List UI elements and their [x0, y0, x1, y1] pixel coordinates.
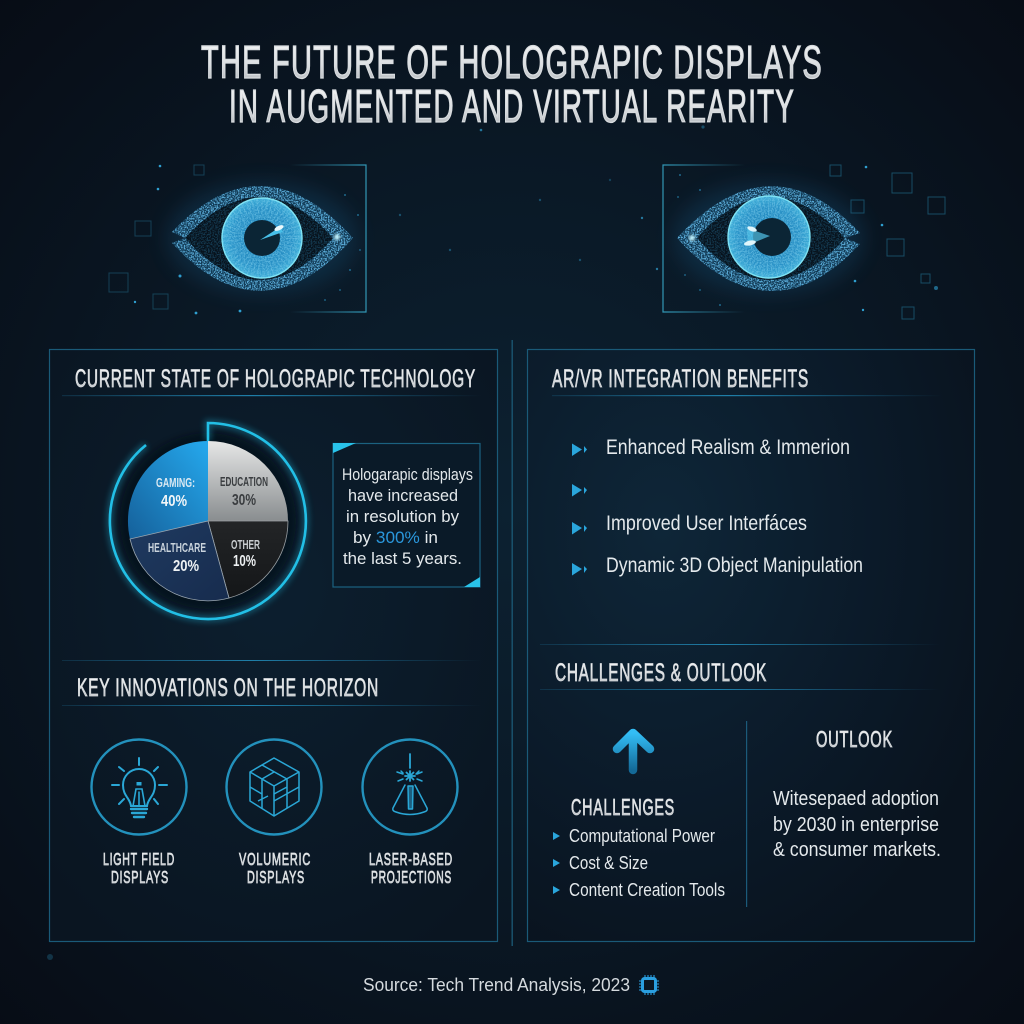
vertical divider between panels — [512, 340, 513, 946]
label: light field displays: DISPLAYS — [111, 867, 169, 887]
bullet 3 — [572, 522, 587, 534]
label: other: OTHER — [231, 537, 260, 552]
panel: left — [50, 350, 498, 942]
slice: other — [208, 521, 288, 598]
decorative squares right — [830, 165, 945, 319]
benefit: manipulation: Dynamic 3D Object Manipulation — [606, 554, 863, 577]
slice: gaming — [128, 441, 208, 539]
label: volumetric displays: VOLUMERIC — [239, 849, 311, 869]
label: other — [231, 537, 260, 570]
callout: resolution stat: in resolution by — [346, 507, 459, 526]
bullet 1 — [572, 444, 587, 456]
label: gaming — [156, 475, 195, 510]
outlook text: & consumer markets. — [773, 839, 941, 861]
outlook block — [773, 726, 941, 861]
challenges block — [553, 794, 725, 900]
label: volumetric displays — [239, 849, 311, 887]
outlook text: Witesepaed adoption — [773, 788, 939, 810]
callout: resolution stat: Hologarapic displays — [342, 465, 473, 484]
heading: challenges and outlook: CHALLENGES & OUTLOOK — [555, 659, 767, 687]
pie chart — [110, 423, 306, 619]
callout: resolution stat: the last 5 years. — [343, 549, 462, 568]
benefit: realism: Enhanced Realism & Immerion — [606, 436, 850, 459]
bullet 2 — [572, 484, 587, 496]
icon: right holographic eye — [663, 165, 864, 312]
background particles — [47, 125, 938, 960]
benefit: interfaces: Improved User Interfáces — [606, 512, 807, 535]
icon: volumetric cube — [226, 740, 322, 834]
challenge item 3: Content Creation Tools — [569, 880, 725, 900]
bullet 4 — [572, 563, 587, 576]
heading: outlook: OUTLOOK — [816, 726, 893, 752]
callout: resolution stat: by 300% in — [353, 528, 438, 547]
icon: left holographic eye — [167, 165, 366, 312]
outlook text — [773, 788, 941, 861]
slice: education — [208, 441, 288, 521]
label: healthcare — [148, 540, 206, 575]
label: education: 30% — [232, 492, 256, 509]
label: education — [220, 474, 268, 509]
label: laser-based projections: LASER-BASED — [369, 849, 453, 869]
decorative squares left — [109, 165, 204, 309]
label: healthcare: 20% — [173, 558, 199, 575]
label: gaming: GAMING: — [156, 475, 195, 490]
source footer: Source: Tech Trend Analysis, 2023 — [363, 975, 630, 995]
heading: AR/VR benefits: AR/VR INTEGRATION BENEFITS — [552, 365, 809, 393]
outer ring — [110, 423, 306, 619]
label: light field displays: LIGHT FIELD — [103, 849, 175, 869]
challenge item 1: Computational Power — [569, 826, 715, 846]
label: other: 10% — [233, 553, 256, 570]
icon: chip — [639, 975, 659, 995]
challenge item 2: Cost & Size — [569, 853, 648, 873]
slice: healthcare — [130, 521, 229, 601]
label: laser-based projections: PROJECTIONS — [371, 867, 452, 887]
heading: current state: CURRENT STATE OF HOLOGRAPIC TECHNOLOGY — [75, 365, 476, 393]
title — [201, 36, 823, 132]
icon: up arrow — [617, 733, 650, 770]
icon: laser projection — [362, 740, 458, 834]
panel: right — [528, 350, 974, 942]
label: laser-based projections — [369, 849, 453, 887]
callout: resolution stat: have increased — [348, 486, 458, 505]
benefits list — [572, 436, 863, 577]
callout: resolution stat — [333, 443, 480, 587]
icon: light field bulb — [92, 740, 186, 834]
outlook text: by 2030 in enterprise — [773, 814, 939, 836]
label: healthcare: HEALTHCARE — [148, 540, 206, 555]
label: education: EDUCATION — [220, 474, 268, 489]
label: gaming: 40% — [161, 493, 187, 510]
label: light field displays — [103, 849, 175, 887]
label: volumetric displays: DISPLAYS — [247, 867, 305, 887]
heading: challenges: CHALLENGES — [571, 794, 675, 820]
heading: key innovations: KEY INNOVATIONS ON THE HORIZON — [77, 674, 379, 702]
